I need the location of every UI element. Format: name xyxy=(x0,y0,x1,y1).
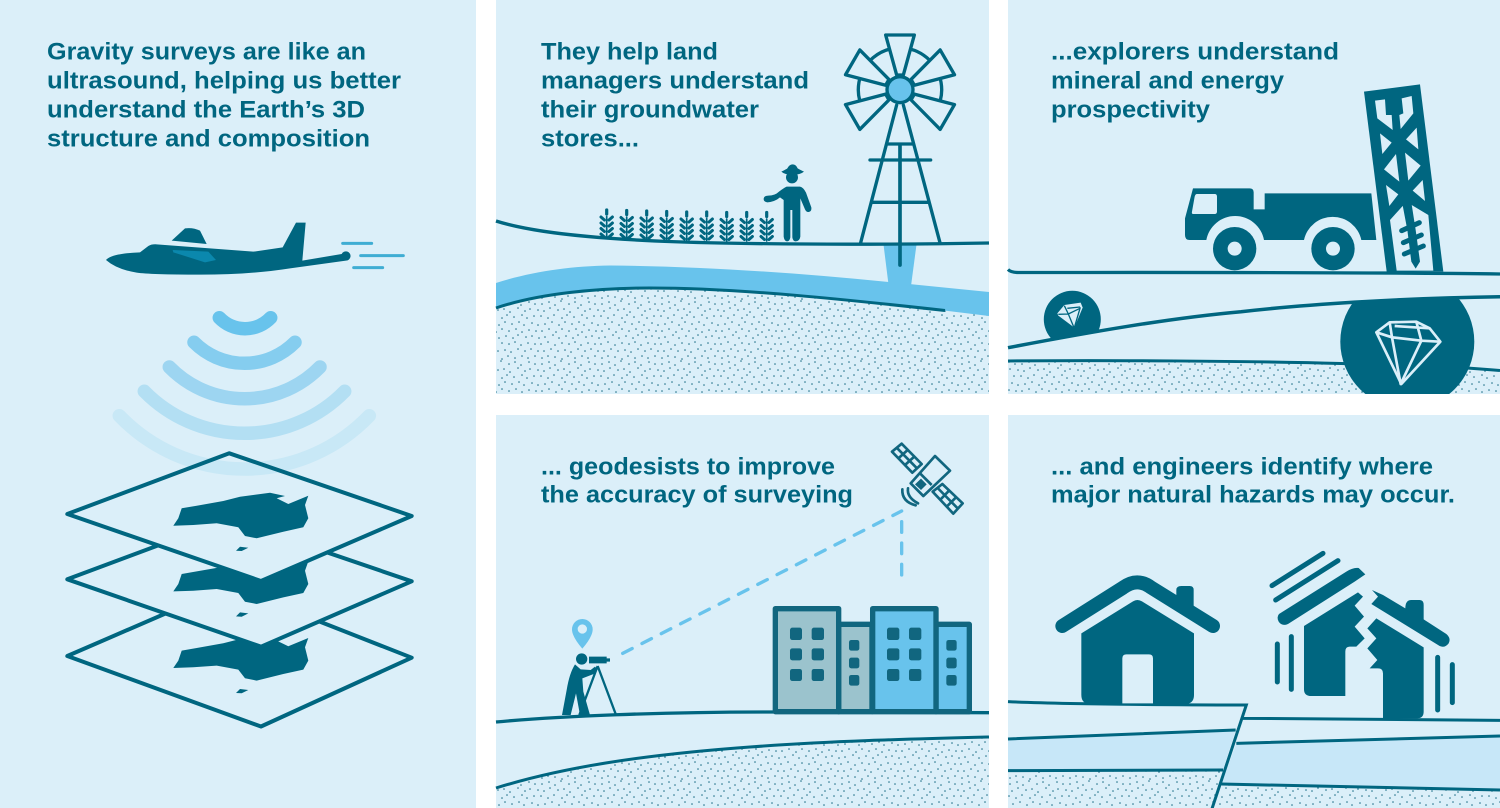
groundwater band xyxy=(496,266,989,316)
icon: drill mast xyxy=(1364,84,1443,272)
heading: land managers: They help land xyxy=(541,38,718,66)
heading: explorers xyxy=(1051,38,1339,124)
heading: land managers xyxy=(541,38,809,152)
heading: engineers xyxy=(1051,454,1455,508)
bedrock line xyxy=(496,737,989,788)
strata lines xyxy=(1008,730,1500,790)
well cone xyxy=(883,243,917,286)
heading: explorers: mineral and energy xyxy=(1051,68,1284,94)
heading: gravity surveys: Gravity surveys are like an xyxy=(47,38,366,66)
ground line xyxy=(496,221,989,244)
panel: explorers xyxy=(1008,0,1500,409)
heading: explorers: prospectivity xyxy=(1051,96,1210,124)
icon: damaged house xyxy=(1272,553,1452,718)
icon: city buildings xyxy=(775,609,969,712)
heading: land managers: their groundwater xyxy=(541,96,759,124)
icon: farmer xyxy=(764,164,811,241)
panel: engineers xyxy=(1008,415,1500,808)
heading: engineers: major natural hazards may occur. xyxy=(1051,482,1455,508)
panel: geodesists xyxy=(496,415,989,808)
icon: small diamond xyxy=(1057,303,1083,328)
heading: gravity surveys xyxy=(47,38,401,152)
icon: intact house xyxy=(1062,582,1213,704)
heading: explorers: ...explorers understand xyxy=(1051,38,1339,66)
bedrock line xyxy=(496,288,945,310)
stippled bedrock xyxy=(496,737,989,808)
layer: bottom map xyxy=(67,586,412,726)
icon: drill truck xyxy=(1185,188,1376,270)
big mineral deposit xyxy=(1340,299,1474,394)
heading: geodesists: ... geodesists to improve xyxy=(541,454,835,480)
dashed sight lines xyxy=(623,511,902,653)
panel: gravity surveys xyxy=(0,0,476,808)
heading: geodesists xyxy=(541,454,853,508)
ground line xyxy=(496,712,989,722)
layer: top map xyxy=(67,416,412,581)
layer: stippled bedrock xyxy=(1008,770,1500,808)
layer: middle map xyxy=(67,519,412,647)
heading: gravity surveys: understand the Earth’s 3D xyxy=(47,96,365,124)
heading: gravity surveys: ultrasound, helping us better xyxy=(47,68,401,94)
icon: gravity signal waves xyxy=(144,318,345,433)
stacked map layers xyxy=(67,416,412,726)
icon: satellite xyxy=(892,444,963,514)
icon: location pin xyxy=(572,619,593,649)
heading: geodesists: the accuracy of surveying xyxy=(541,482,853,508)
icon: surveyor with tripod xyxy=(562,653,616,715)
panel: land managers xyxy=(496,0,989,394)
heading: gravity surveys: structure and composition xyxy=(47,126,370,152)
icon: windmill xyxy=(845,35,955,265)
icon: big diamond xyxy=(1376,322,1440,384)
heading: land managers: managers understand xyxy=(541,68,809,94)
icon: survey plane xyxy=(106,223,403,275)
fault strata xyxy=(1008,702,1500,808)
ground line xyxy=(1008,270,1500,274)
icon: wheat crop xyxy=(601,210,772,241)
fault line and ground xyxy=(1008,702,1500,808)
heading: engineers: ... and engineers identify where xyxy=(1051,454,1433,480)
heading: land managers: stores... xyxy=(541,126,639,152)
small mineral deposit xyxy=(1044,290,1101,338)
layer: water-bearing stratum xyxy=(1008,730,1500,790)
stippled bedrock xyxy=(1008,361,1500,394)
strata lines xyxy=(1008,361,1500,370)
stippled bedrock xyxy=(496,288,989,394)
